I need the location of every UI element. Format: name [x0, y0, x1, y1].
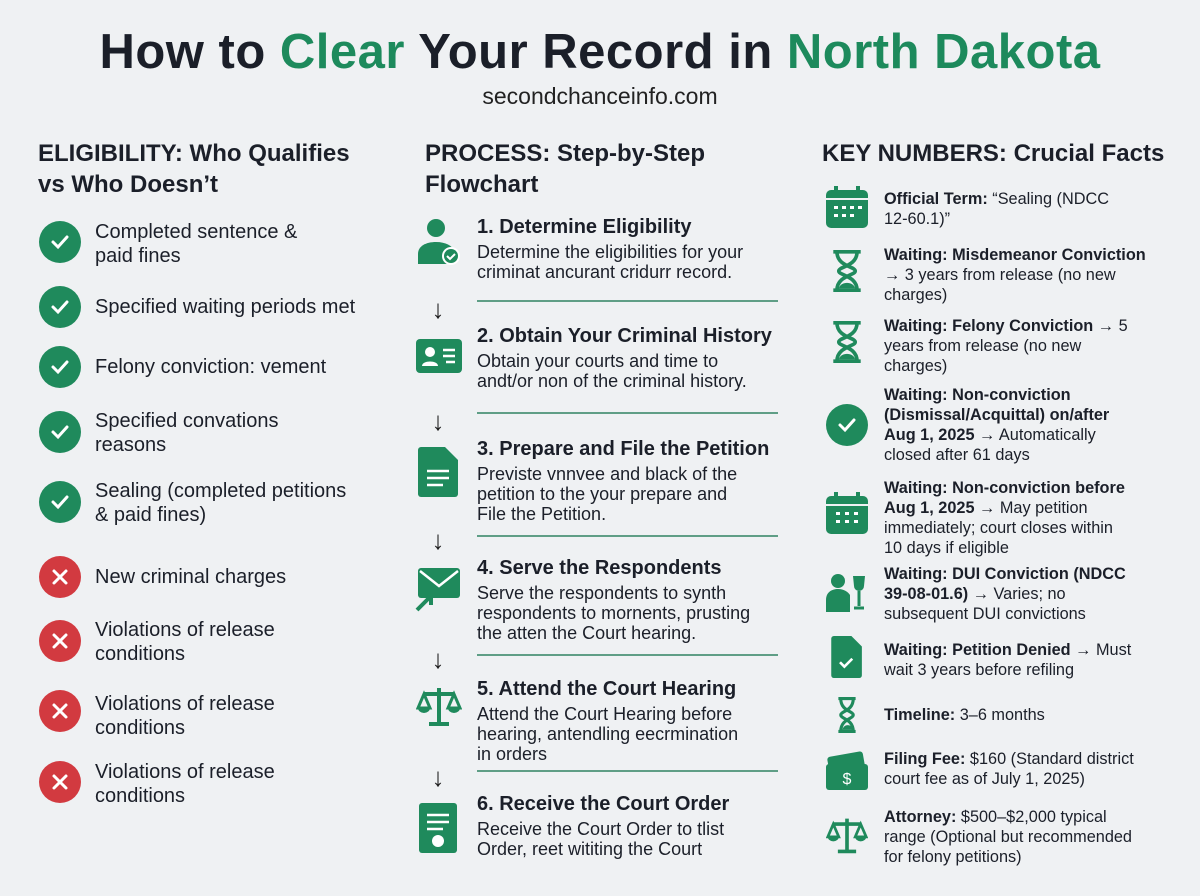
item: sealing: & paid fines) — [95, 504, 206, 526]
item: completed sentence: paid fines — [95, 245, 181, 267]
heading: process: Flowchart — [425, 171, 538, 198]
item: violations 2: conditions — [95, 717, 185, 739]
fact: DUI: 39-08-01.6) → Varies; no — [884, 585, 1066, 603]
step 3: petition to the your prepare and — [477, 484, 727, 504]
icon: hourglass 1 — [833, 250, 861, 292]
step 6: Order, reet wititing the Court — [477, 839, 702, 859]
item: sealing: Sealing (completed petitions — [95, 480, 346, 502]
icon: x 3 — [39, 690, 81, 732]
icon: hourglass 2 — [833, 321, 861, 363]
fact: felony: years from release (no new — [884, 337, 1081, 355]
icon: money: $ — [843, 771, 852, 788]
step 2: andt/or non of the criminal history. — [477, 371, 747, 391]
fact: non-conviction before: Waiting: Non-conviction before — [884, 479, 1125, 497]
fact: felony — [884, 317, 1128, 375]
icon: check 1 — [39, 221, 81, 263]
fact: non-conviction before — [884, 479, 1125, 557]
icon: id card — [416, 339, 462, 373]
fact: non-conviction after — [884, 386, 1109, 464]
fact: misdemeanor — [884, 246, 1146, 304]
fact: non-conviction after: (Dismissal/Acquittal) on/after — [884, 406, 1109, 424]
icon: calendar 2 — [826, 492, 868, 534]
fact: attorney: for felony petitions) — [884, 848, 1022, 866]
icon: check 4 — [39, 411, 81, 453]
fact: official term: 12-60.1)” — [884, 210, 950, 228]
item: convations: Specified convations — [95, 410, 278, 432]
item: violations 2: Violations of release — [95, 693, 275, 715]
step 5 — [477, 678, 738, 764]
heading: eligibility: vs Who Doesn’t — [38, 171, 218, 198]
step 3: File the Petition. — [477, 504, 606, 524]
step 6: 6. Receive the Court Order — [477, 793, 729, 815]
item: completed sentence — [95, 221, 298, 267]
arrow 3: ↓ — [432, 525, 444, 555]
arrow 2: ↓ — [432, 406, 444, 436]
fact: petition denied: wait 3 years before refiling — [884, 661, 1074, 679]
step 4: respondents to mornents, prusting — [477, 603, 750, 623]
heading: process — [425, 140, 705, 198]
fact: DUI: Waiting: DUI Conviction (NDCC — [884, 565, 1126, 583]
step 5: 5. Attend the Court Hearing — [477, 678, 736, 700]
fact: petition denied — [884, 641, 1132, 679]
icon: court order — [419, 803, 457, 853]
step 2 — [477, 325, 772, 391]
item: violations 1 — [95, 619, 275, 665]
icon: document — [418, 447, 458, 497]
item: sealing — [95, 480, 346, 526]
fact: attorney — [884, 807, 1184, 867]
fact: filing fee — [884, 750, 1134, 788]
fact: felony: charges) — [884, 357, 947, 375]
step 2: Obtain your courts and time to — [477, 351, 718, 371]
heading: process: PROCESS: Step-by-Step — [425, 140, 705, 167]
fact: filing fee: Filing Fee: $160 (Standard district — [884, 750, 1134, 768]
item: convations — [95, 410, 278, 456]
icon: check 3 — [39, 346, 81, 388]
step 6: Receive the Court Order to tlist — [477, 819, 724, 839]
fact: official term — [884, 190, 1109, 228]
step 5: in orders — [477, 744, 547, 764]
icon: x 1 — [39, 556, 81, 598]
fact: misdemeanor: Waiting: Misdemeanor Conviction — [884, 246, 1146, 264]
fact: DUI: subsequent DUI convictions — [884, 605, 1086, 623]
item: violations 3: Violations of release — [95, 761, 275, 783]
step 2: 2. Obtain Your Criminal History — [477, 325, 772, 347]
fact: petition denied: Waiting: Petition Denied → Must — [884, 641, 1131, 659]
heading: eligibility: ELIGIBILITY: Who Qualifies — [38, 140, 350, 167]
title: How to Clear Your Record in North Dakota — [99, 25, 1101, 79]
item: violations 3: conditions — [95, 785, 185, 807]
step 4 — [477, 557, 750, 643]
fact: non-conviction before: Aug 1, 2025 → May petition — [884, 499, 1088, 517]
item: violations 2 — [95, 693, 275, 739]
fact: non-conviction before: 10 days if eligible — [884, 539, 1009, 557]
step 3 — [477, 438, 769, 524]
step 3: 3. Prepare and File the Petition — [477, 438, 769, 460]
fact: attorney: range (Optional but recommended — [884, 828, 1132, 846]
icon: hourglass 3 — [838, 697, 856, 733]
icon: x 2 — [39, 620, 81, 662]
arrow 5: ↓ — [432, 762, 444, 792]
step 3: Previste vnnvee and black of the — [477, 464, 737, 484]
item: violations 1: Violations of release — [95, 619, 275, 641]
heading: key numbers: KEY NUMBERS: Crucial Facts — [822, 140, 1164, 167]
step 4: Serve the respondents to synth — [477, 583, 726, 603]
fact: misdemeanor: charges) — [884, 286, 947, 304]
icon: check 2 — [39, 286, 81, 328]
fact: timeline: Timeline: 3–6 months — [884, 706, 1045, 724]
step 1: Determine the eligibilities for your criminat ancurant cridurr record. — [477, 242, 743, 282]
fact: non-conviction after: Waiting: Non-conviction — [884, 386, 1071, 404]
icon: calendar 1 — [826, 186, 868, 228]
icon: x 4 — [39, 761, 81, 803]
step 4: 4. Serve the Respondents — [477, 557, 722, 579]
item: waiting periods: Specified waiting periods met — [95, 296, 355, 318]
step 4: the atten the Court hearing. — [477, 623, 696, 643]
item: convations: reasons — [95, 434, 166, 456]
panel: eligibility — [38, 140, 350, 198]
step 5: Attend the Court Hearing before — [477, 704, 732, 724]
icon: person check — [418, 219, 460, 265]
fact: non-conviction before: immediately; court closes within — [884, 519, 1113, 537]
arrow 4: ↓ — [432, 644, 444, 674]
fact: misdemeanor: → 3 years from release (no new — [884, 266, 1116, 284]
icon: check 5 — [39, 481, 81, 523]
step 1 — [477, 216, 743, 282]
item: violations 1: conditions — [95, 643, 185, 665]
icon: doc check — [831, 636, 862, 678]
icon: people glass — [826, 574, 865, 612]
fact: DUI — [884, 565, 1126, 623]
arrow 1: ↓ — [432, 294, 444, 324]
fact: non-conviction after: Aug 1, 2025 → Automatically — [884, 426, 1096, 444]
item: new charges: New criminal charges — [95, 566, 286, 588]
fact: non-conviction after: closed after 61 days — [884, 446, 1030, 464]
step 5: hearing, antendling eecrmination — [477, 724, 738, 744]
fact: official term: Official Term: “Sealing (NDCC — [884, 190, 1109, 208]
icon: scales — [416, 688, 462, 726]
fact: attorney: Attorney: $500–$2,000 typical — [884, 808, 1107, 826]
step 1: 1. Determine Eligibility — [477, 216, 692, 238]
item: completed sentence: Completed sentence & — [95, 221, 297, 243]
icon: money — [826, 752, 868, 790]
fact: filing fee: court fee as of July 1, 2025) — [884, 770, 1085, 788]
step 6 — [477, 793, 729, 859]
subtitle: secondchanceinfo.com — [482, 83, 718, 109]
icon: check circle — [826, 404, 868, 446]
item: felony: Felony conviction: vement — [95, 356, 326, 378]
fact: felony: Waiting: Felony Conviction → 5 — [884, 317, 1128, 335]
icon: envelope — [416, 568, 460, 612]
heading: eligibility — [38, 140, 350, 198]
item: violations 3 — [95, 761, 275, 807]
icon: scales 2 — [826, 818, 868, 854]
